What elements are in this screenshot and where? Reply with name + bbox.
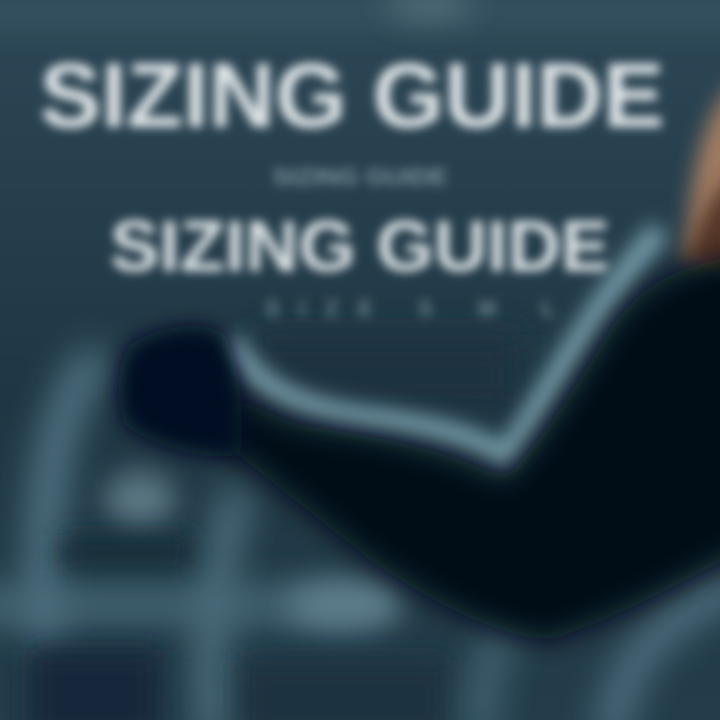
small subtitle: SIZING GUIDE	[272, 164, 448, 191]
skin: shoulder and neck	[685, 75, 720, 270]
figure: arm with fist	[119, 75, 720, 640]
small caption: SIZE S M L	[265, 296, 555, 321]
light outline of arm	[230, 230, 660, 458]
heading: sizing guide: SIZING GUIDE	[40, 45, 664, 147]
dark sleeve and torso	[225, 255, 720, 640]
secondary heading: sizing guide: SIZING GUIDE	[110, 207, 610, 287]
dark fist	[119, 326, 242, 456]
dark hair edge	[685, 170, 720, 275]
